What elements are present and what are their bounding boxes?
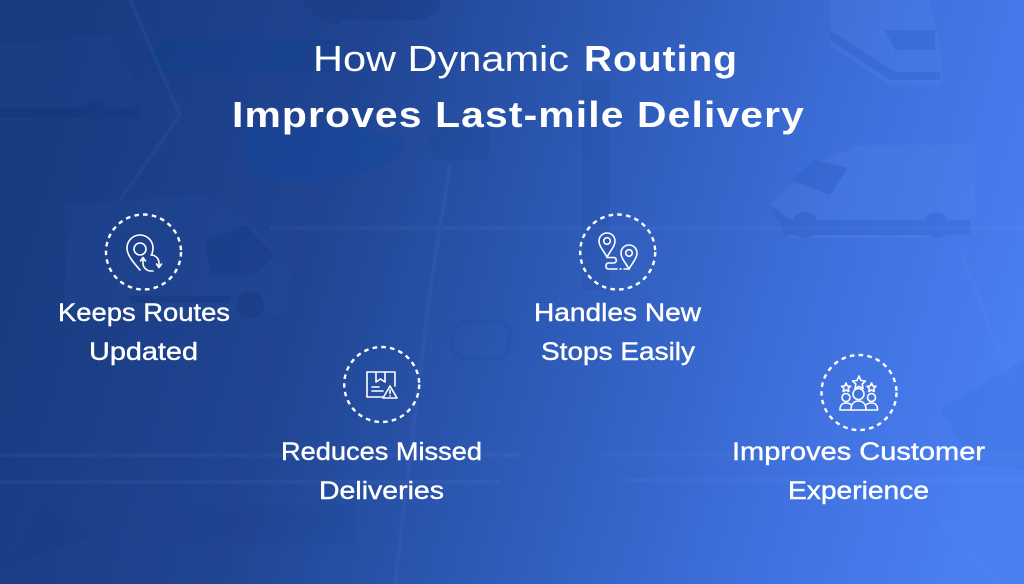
title word: Routing: Routing <box>584 38 738 79</box>
label line 2: Stops Easily <box>541 338 696 366</box>
title line 1: How Dynamic <box>313 38 569 79</box>
van: bottom right <box>940 360 1024 470</box>
icon: dashed ring with two location pins and route <box>580 214 655 290</box>
label line 2: Updated <box>89 338 198 366</box>
item: Keeps Routes Updated <box>58 214 230 366</box>
icon: dashed ring with parcel and warning triangle <box>344 347 419 422</box>
item: Handles New Stops Easily <box>534 214 702 366</box>
van: top right <box>830 0 942 85</box>
icon: dashed ring with location pin and refresh arrows <box>106 214 181 290</box>
label: Handles New <box>534 299 702 327</box>
title line 2: Improves Last-mile Delivery <box>232 94 805 135</box>
icon: dashed ring with three people and three stars <box>822 355 896 430</box>
van: left centre <box>65 195 292 319</box>
label: Improves Customer <box>732 438 985 466</box>
label: Reduces Missed <box>281 438 482 466</box>
item: Reduces Missed Deliveries <box>281 347 482 505</box>
label line 2: Deliveries <box>319 477 444 505</box>
van: top left <box>0 35 138 120</box>
label line 2: Experience <box>788 477 929 505</box>
title <box>232 38 805 135</box>
item: Improves Customer Experience <box>732 355 985 505</box>
label: Keeps Routes <box>58 299 230 327</box>
van: right centre <box>770 145 975 238</box>
van: top centre <box>300 0 440 24</box>
